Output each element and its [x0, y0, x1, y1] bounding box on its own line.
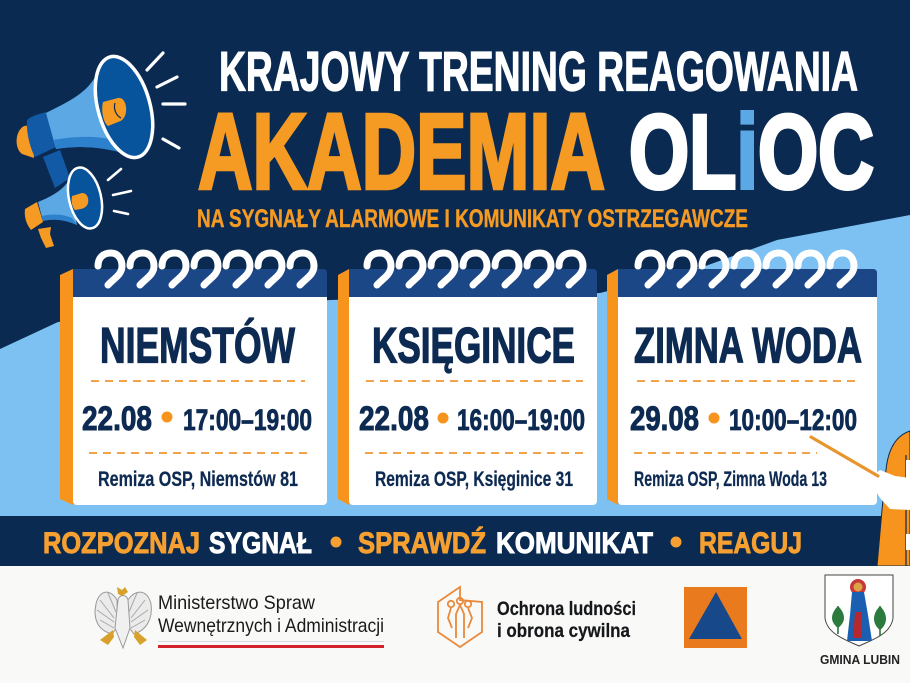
logo: Gmina Lubin crest [825, 575, 893, 646]
text: civil protection: i obrona cywilna [497, 621, 630, 642]
background: light blue diagonal [0, 215, 910, 520]
card header [349, 269, 597, 297]
icon: small megaphone sound lines [108, 169, 131, 214]
date: 22.08 [359, 400, 429, 438]
card spine [607, 269, 618, 505]
separator dot [162, 412, 172, 422]
separator dot [438, 412, 448, 424]
card body [73, 280, 327, 505]
text: Ministry name: Wewnętrznych i Administracji [158, 615, 384, 637]
figure: rescuer with pointer [811, 431, 910, 566]
address: Remiza OSP, Księginice 31 [375, 468, 573, 491]
icon: megaphone sound lines [147, 53, 185, 148]
card body [349, 280, 597, 505]
separator dot [708, 412, 720, 424]
slogan: rozpoznaj sygnał: ROZPOZNAJ [43, 527, 200, 560]
binding rings [367, 253, 583, 285]
icon: small megaphone [25, 164, 108, 248]
panel: Niemstów calendar card [60, 253, 327, 505]
panel: Księginice calendar card [338, 253, 597, 505]
logo: civil defence triangle [684, 587, 747, 648]
card spine [60, 269, 73, 505]
text: Ministry name [158, 592, 384, 648]
date: 29.08 [630, 400, 699, 438]
heading: AKADEMIA: AKADEMIA [198, 90, 605, 212]
text: civil protection: Ochrona ludności [497, 599, 636, 620]
place name: KSIĘGINICE [372, 318, 575, 374]
time: 16:00–19:00 [457, 404, 585, 437]
text: Gmina Lubin: GMINA LUBIN [820, 653, 900, 667]
slogan band: KOMUNIKAT [496, 527, 653, 560]
panel: Zimna Woda calendar card [607, 253, 877, 505]
card spine [338, 269, 349, 505]
date: 22.08 [82, 400, 152, 438]
text: Ministry name: Ministerstwo Spraw [158, 592, 316, 614]
binding rings [98, 253, 314, 285]
slogan: sprawdź komunikat: SPRAWDŹ [358, 526, 486, 560]
slogan: reaguj: REAGUJ [699, 527, 802, 560]
address: Remiza OSP, Niemstów 81 [98, 468, 298, 491]
time: 17:00–19:00 [183, 404, 312, 437]
icon: large megaphone [17, 50, 163, 188]
binding rings [638, 253, 854, 285]
place name: NIEMSTÓW [100, 318, 296, 374]
footer panel [0, 566, 910, 683]
card header [73, 269, 327, 297]
time: 10:00–12:00 [729, 404, 857, 437]
card header [618, 269, 877, 297]
heading: OLiOC: OLiOC [629, 94, 874, 211]
card body [618, 280, 877, 505]
slogan band: SYGNAŁ [209, 527, 312, 560]
slogan band [0, 516, 910, 566]
logo: civil protection hexagon [438, 587, 482, 647]
logo: Polish eagle [95, 587, 151, 648]
text: civil protection [497, 599, 636, 642]
subtitle: NA SYGNAŁY ALARMOWE I KOMUNIKATY OSTRZEGAWCZE [197, 205, 748, 233]
